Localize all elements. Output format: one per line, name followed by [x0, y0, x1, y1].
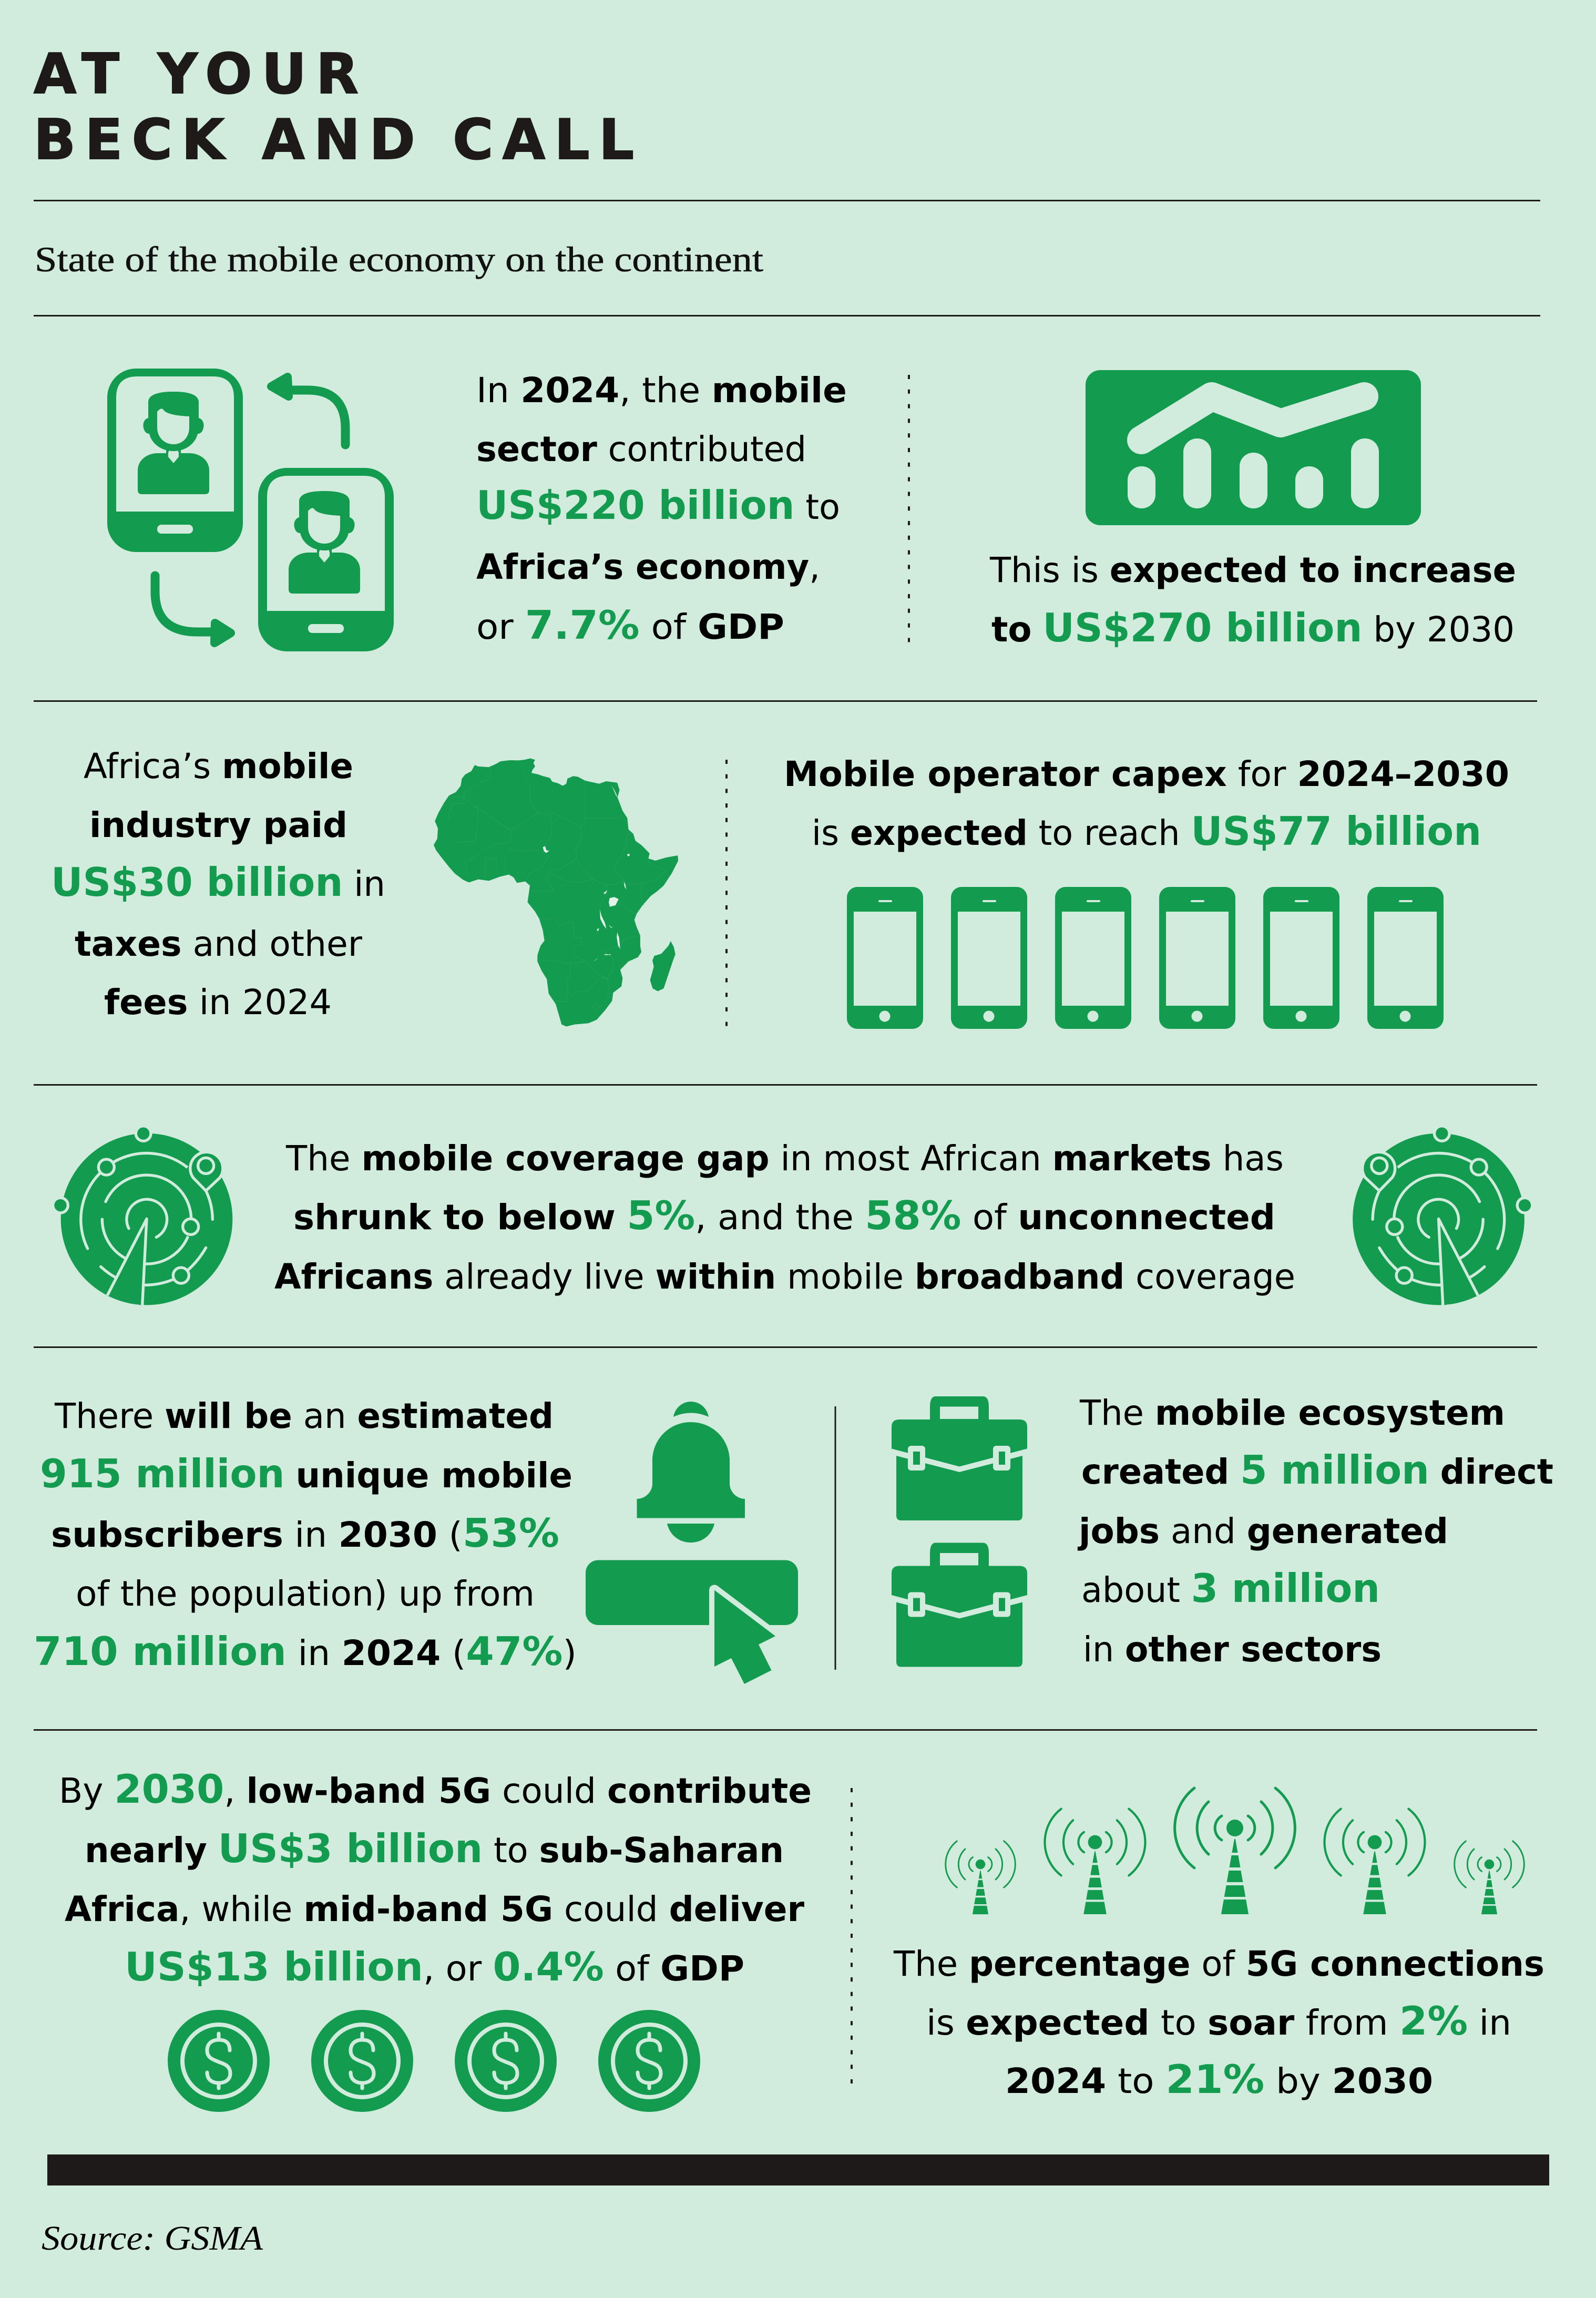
- source: Source: GSMA: [42, 2219, 263, 2258]
- panel: operator capex: [784, 754, 1509, 1029]
- panel: jobs: [892, 1393, 1553, 1670]
- text: US$270 billion forecast: This is expected to increase: [989, 550, 1516, 590]
- footer bar: [47, 2154, 1549, 2185]
- panel: low-band and mid-band 5G: [59, 1766, 812, 2112]
- title: BECK AND CALL: [34, 108, 634, 172]
- text: US$30 billion in taxes: Africa’s mobile: [84, 746, 353, 787]
- text: US$30 billion in taxes: US$30 billion in: [51, 859, 385, 905]
- icon: four dollar coins: [168, 2010, 700, 2112]
- text: 915 million subscribers: of the population) up from: [76, 1574, 535, 1614]
- text: 5G share: The percentage of 5G connections: [893, 1944, 1544, 1984]
- icon: five signal towers: [946, 1788, 1524, 1914]
- icon: radar right: [1353, 1126, 1532, 1305]
- title: [34, 42, 634, 172]
- text: 915 million subscribers: There will be an estimated: [54, 1396, 554, 1436]
- icon: six smartphones: [847, 887, 1444, 1029]
- text: coverage gap: The mobile coverage gap in most African markets has: [285, 1138, 1284, 1179]
- text: 915 million subscribers: subscribers in 2030 (53%: [51, 1510, 559, 1556]
- text: 5 million direct jobs: The mobile ecosystem: [1079, 1393, 1505, 1433]
- text: US$30 billion in taxes: industry paid: [89, 805, 347, 845]
- text: 5 million direct jobs: [1077, 1393, 1553, 1670]
- text: US$220 billion contribution: Africa’s economy,: [476, 547, 820, 587]
- text: 5G share: 2024 to 21% by 2030: [1005, 2056, 1433, 2102]
- text: US$220 billion contribution: In 2024, the mobile: [476, 370, 847, 411]
- text: US$220 billion contribution: [476, 370, 847, 648]
- text: US$270 billion forecast: [989, 550, 1516, 651]
- text: 915 million subscribers: 915 million unique mobile: [40, 1451, 572, 1497]
- icon: map of Africa: [434, 758, 678, 1027]
- icon: two briefcases: [892, 1396, 1027, 1667]
- text: 5 million direct jobs: in other sectors: [1083, 1629, 1382, 1670]
- text: capex US$77 billion: is expected to reach US$77 billion: [812, 808, 1481, 854]
- text: 5G share: is expected to soar from 2% in: [926, 1998, 1511, 2044]
- panel: mobile sector contribution: [107, 369, 847, 651]
- text: 5G contribution: nearly US$3 billion to sub-Saharan: [85, 1825, 784, 1872]
- icon: radar left: [53, 1126, 232, 1305]
- panel: 2030 forecast: [989, 370, 1516, 651]
- icon: chart card: [1086, 370, 1421, 525]
- text: US$30 billion in taxes: fees in 2024: [104, 982, 332, 1023]
- panel: coverage gap: [53, 1126, 1532, 1305]
- text: 5 million direct jobs: jobs and generated: [1077, 1511, 1448, 1551]
- text: 5 million direct jobs: about 3 million: [1081, 1565, 1380, 1611]
- text: 5G contribution: US$13 billion, or 0.4% of GDP: [125, 1944, 744, 1990]
- panel: subscribers: [34, 1396, 798, 1684]
- panel: 5G connections: [893, 1788, 1544, 2102]
- icon: two phones exchanging calls: [107, 369, 394, 651]
- text: coverage gap: shrunk to below 5%, and the 58% of unconnected: [293, 1192, 1275, 1239]
- text: 915 million subscribers: [34, 1396, 577, 1674]
- text: capex US$77 billion: [784, 754, 1509, 854]
- text: US$30 billion in taxes: taxes and other: [75, 924, 363, 964]
- text: US$220 billion contribution: or 7.7% of GDP: [476, 602, 784, 648]
- text: US$30 billion in taxes: [51, 746, 385, 1023]
- subtitle: State of the mobile economy on the continent: [35, 239, 763, 279]
- text: US$220 billion contribution: sector contributed: [476, 429, 806, 469]
- text: 5G contribution: Africa, while mid-band 5G could deliver: [65, 1889, 804, 1929]
- title: AT YOUR: [34, 42, 359, 106]
- panel: taxes and fees: [51, 746, 678, 1027]
- text: 915 million subscribers: 710 million in 2024 (47%): [34, 1628, 577, 1674]
- text: 5G share: [893, 1944, 1544, 2102]
- text: US$270 billion forecast: to US$270 billion by 2030: [991, 605, 1515, 651]
- icon: bell and click button: [586, 1402, 798, 1684]
- text: coverage gap: Africans already live within mobile broadband coverage: [274, 1257, 1295, 1297]
- text: 5G contribution: By 2030, low-band 5G could contribute: [59, 1766, 812, 1812]
- text: coverage gap: [274, 1138, 1295, 1297]
- text: 5 million direct jobs: created 5 million direct: [1081, 1447, 1553, 1493]
- text: 5G contribution: [59, 1766, 812, 1990]
- text: US$220 billion contribution: US$220 billion to: [476, 482, 840, 528]
- text: capex US$77 billion: Mobile operator capex for 2024–2030: [784, 754, 1509, 794]
